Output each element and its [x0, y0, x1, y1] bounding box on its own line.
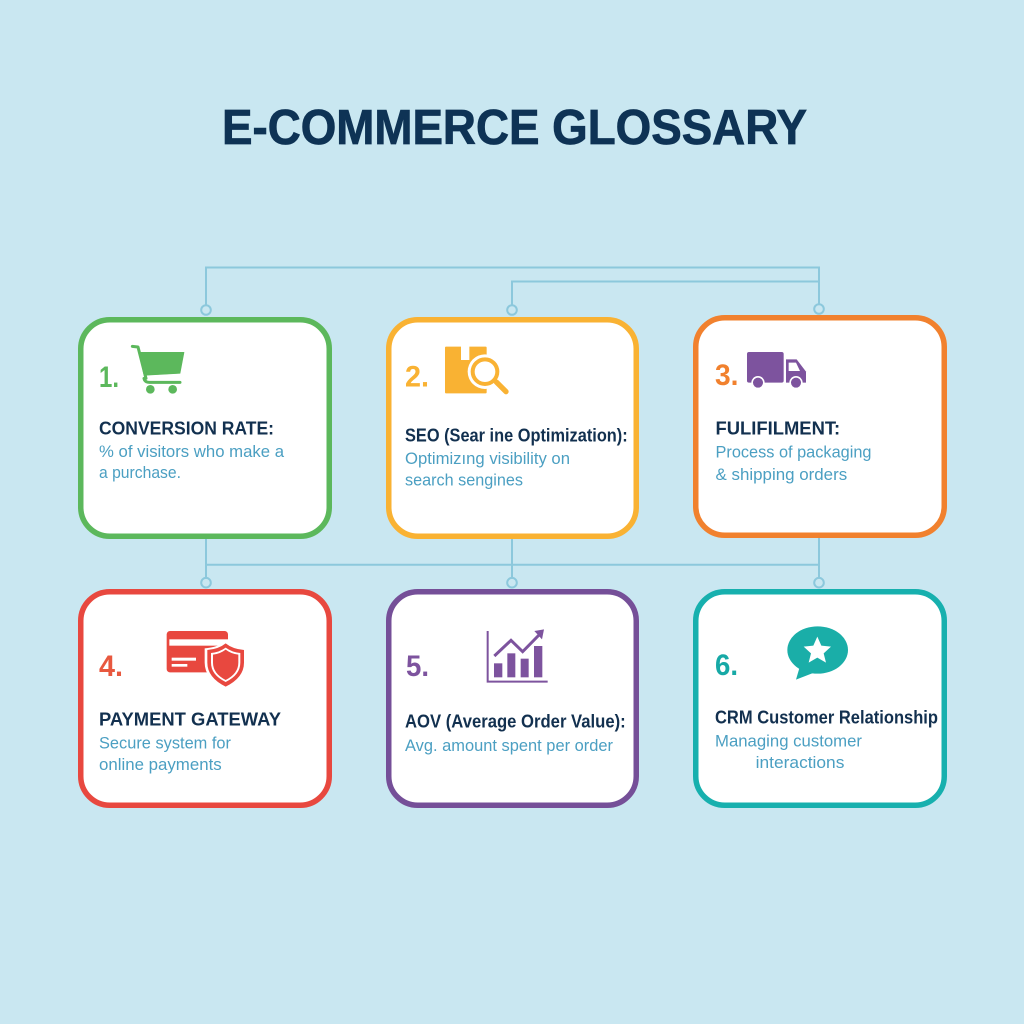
panel: AOV	[389, 592, 636, 805]
number 5: 5.	[406, 650, 429, 683]
description: fulfilment: Process of packaging	[716, 443, 872, 461]
panel: fulfilment	[696, 318, 944, 535]
icon: speech bubble with star	[787, 626, 848, 680]
heading: AOV: AOV (Average Order Value):	[405, 712, 626, 732]
heading: payment gateway: PAYMENT GATEWAY	[99, 709, 281, 729]
panel: payment gateway	[81, 592, 329, 805]
description: conversion rate: % of visitors who make a	[99, 443, 285, 461]
description: SEO: Optimizıng visibility on	[405, 450, 570, 468]
heading: SEO: SEO (Sear ine Optimization):	[405, 426, 628, 446]
panel: SEO	[389, 320, 636, 536]
icon: box with magnifier	[445, 347, 506, 393]
number 6: 6.	[715, 649, 738, 682]
icon: rising bar chart	[488, 629, 548, 682]
heading: conversion rate: CONVERSION RATE:	[99, 418, 274, 438]
description: CRM	[715, 733, 862, 772]
description: payment gateway: Secure system for	[99, 734, 231, 752]
icon: shopping cart	[132, 346, 184, 394]
description: fulfilment	[716, 443, 872, 484]
description: payment gateway	[99, 734, 231, 774]
number 2: 2.	[405, 361, 429, 394]
description: fulfilment: & shipping orders	[716, 466, 847, 484]
icon: credit card with shield	[167, 631, 247, 689]
heading: CRM: CRM Customer Relationship	[715, 707, 938, 727]
title: E-COMMERCE GLOSSARY	[222, 101, 807, 155]
panel: conversion rate	[81, 320, 329, 536]
heading: fulfilment: FULIFILMENT:	[716, 418, 840, 438]
icon: delivery truck	[747, 352, 806, 389]
description: CRM: Managing customer	[715, 733, 862, 751]
description: payment gateway: online payments	[99, 756, 222, 774]
number 4: 4.	[99, 650, 123, 683]
number 1: 1.	[99, 361, 119, 394]
connector lines: top row	[201, 268, 824, 315]
connector lines: bottom row	[201, 538, 824, 588]
description: conversion rate	[99, 443, 285, 482]
description: conversion rate: a purchase.	[99, 464, 181, 482]
description: AOV: Avg. amount spent per order	[405, 737, 613, 755]
description: CRM: interactions	[756, 754, 844, 772]
description: SEO: search sengines	[405, 472, 523, 490]
panel: CRM	[696, 592, 944, 805]
description: SEO	[405, 450, 570, 490]
number 3: 3.	[715, 359, 738, 392]
